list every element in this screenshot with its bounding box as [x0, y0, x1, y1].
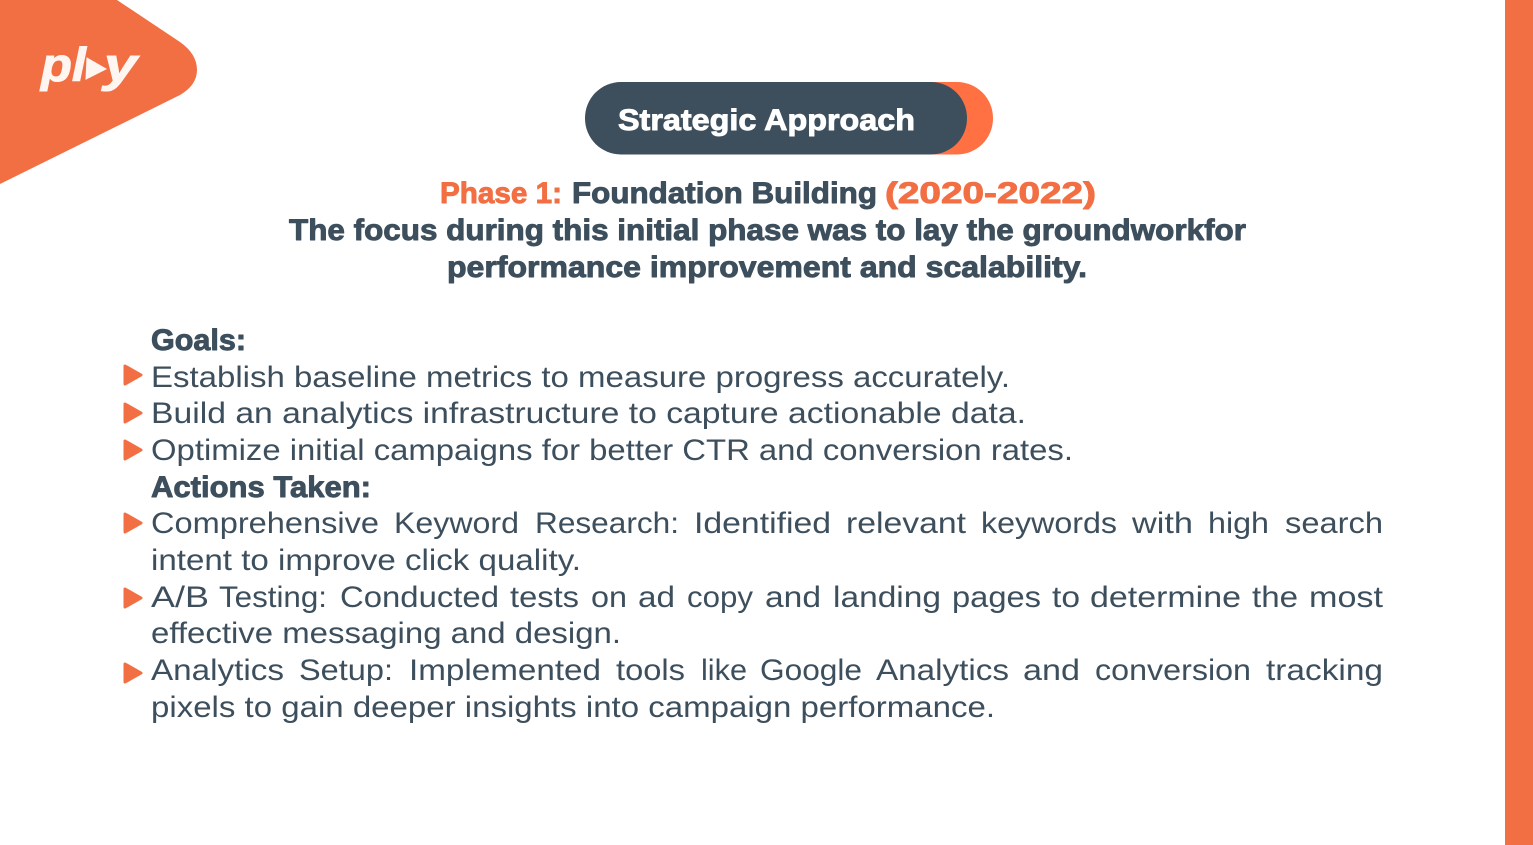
logo wordmark: [39, 38, 141, 91]
action three: Analytics: [876, 654, 1009, 687]
phase description line one: The focus during this initial phase was to lay the groundworkfor: [289, 214, 1247, 247]
action one: Comprehensive: [151, 507, 379, 540]
action three: like: [701, 654, 747, 687]
goal three: Optimize initial campaigns for better CTR and conversion rates.: [151, 434, 1073, 467]
action three: Google: [760, 654, 862, 687]
pill dark front: [585, 82, 967, 154]
action one: Research:: [535, 507, 679, 540]
action two: Testing:: [219, 581, 327, 614]
badge shape: [0, 0, 197, 184]
logo wordmark: y: [101, 38, 141, 91]
pill title text: Strategic Approach: [618, 104, 915, 137]
goals section: [125, 324, 1073, 467]
logo wordmark: pl: [39, 38, 87, 91]
action three: pixels to gain deeper insights into campaign performance.: [151, 691, 995, 724]
action two: pages: [952, 581, 1041, 614]
action three: tools: [616, 654, 685, 687]
action three: Setup:: [299, 654, 393, 687]
action one: Identified: [694, 507, 831, 540]
action one: intent to improve click quality.: [151, 544, 581, 577]
title pill: [585, 82, 993, 154]
action two: most: [1309, 581, 1383, 614]
action one: Keyword: [394, 507, 519, 540]
action one: with: [1131, 507, 1193, 540]
action two: ad: [638, 581, 675, 614]
goal bullet three: [125, 441, 141, 459]
action one: keywords: [981, 507, 1117, 540]
action two: [151, 581, 1383, 650]
action two: on: [591, 581, 627, 614]
action three: Analytics: [151, 654, 284, 687]
goal bullet one: [125, 366, 141, 384]
action bullet one: [125, 514, 141, 532]
goals heading: Goals:: [151, 324, 246, 357]
right orange bar: [1505, 0, 1533, 845]
action two: landing: [833, 581, 941, 614]
action bullet two: [125, 589, 141, 607]
logo badge: [0, 0, 197, 184]
action two: copy: [687, 581, 753, 614]
goal one: Establish baseline metrics to measure progress accurately.: [151, 361, 1010, 394]
phase name: Foundation Building: [572, 177, 877, 210]
actions section: [125, 471, 1383, 724]
action two: determine: [1090, 581, 1241, 614]
action three: Implemented: [409, 654, 601, 687]
action three: [151, 654, 1383, 724]
phase heading: [289, 177, 1247, 284]
phase years: (2020-2022): [885, 177, 1096, 210]
action one: high: [1208, 507, 1269, 540]
actions heading: Actions Taken:: [151, 471, 371, 504]
pill orange backing: [640, 82, 993, 154]
action one: search: [1285, 507, 1383, 540]
action three: conversion: [1095, 654, 1251, 687]
action two: and: [765, 581, 821, 614]
action one: [151, 507, 1383, 577]
goal bullet two: [125, 404, 141, 422]
action two: tests: [510, 581, 579, 614]
action three: and: [1023, 654, 1080, 687]
action bullet three: [125, 664, 141, 682]
action two: effective messaging and design.: [151, 617, 621, 650]
goal two: Build an analytics infrastructure to capture actionable data.: [151, 397, 1026, 430]
action two: the: [1252, 581, 1298, 614]
action two: A/B: [151, 581, 209, 614]
action two: Conducted: [340, 581, 499, 614]
phase description line two: performance improvement and scalability.: [447, 251, 1087, 284]
action one: relevant: [846, 507, 966, 540]
action two: to: [1052, 581, 1080, 614]
action three: tracking: [1266, 654, 1383, 687]
phase label: Phase 1:: [440, 177, 562, 210]
